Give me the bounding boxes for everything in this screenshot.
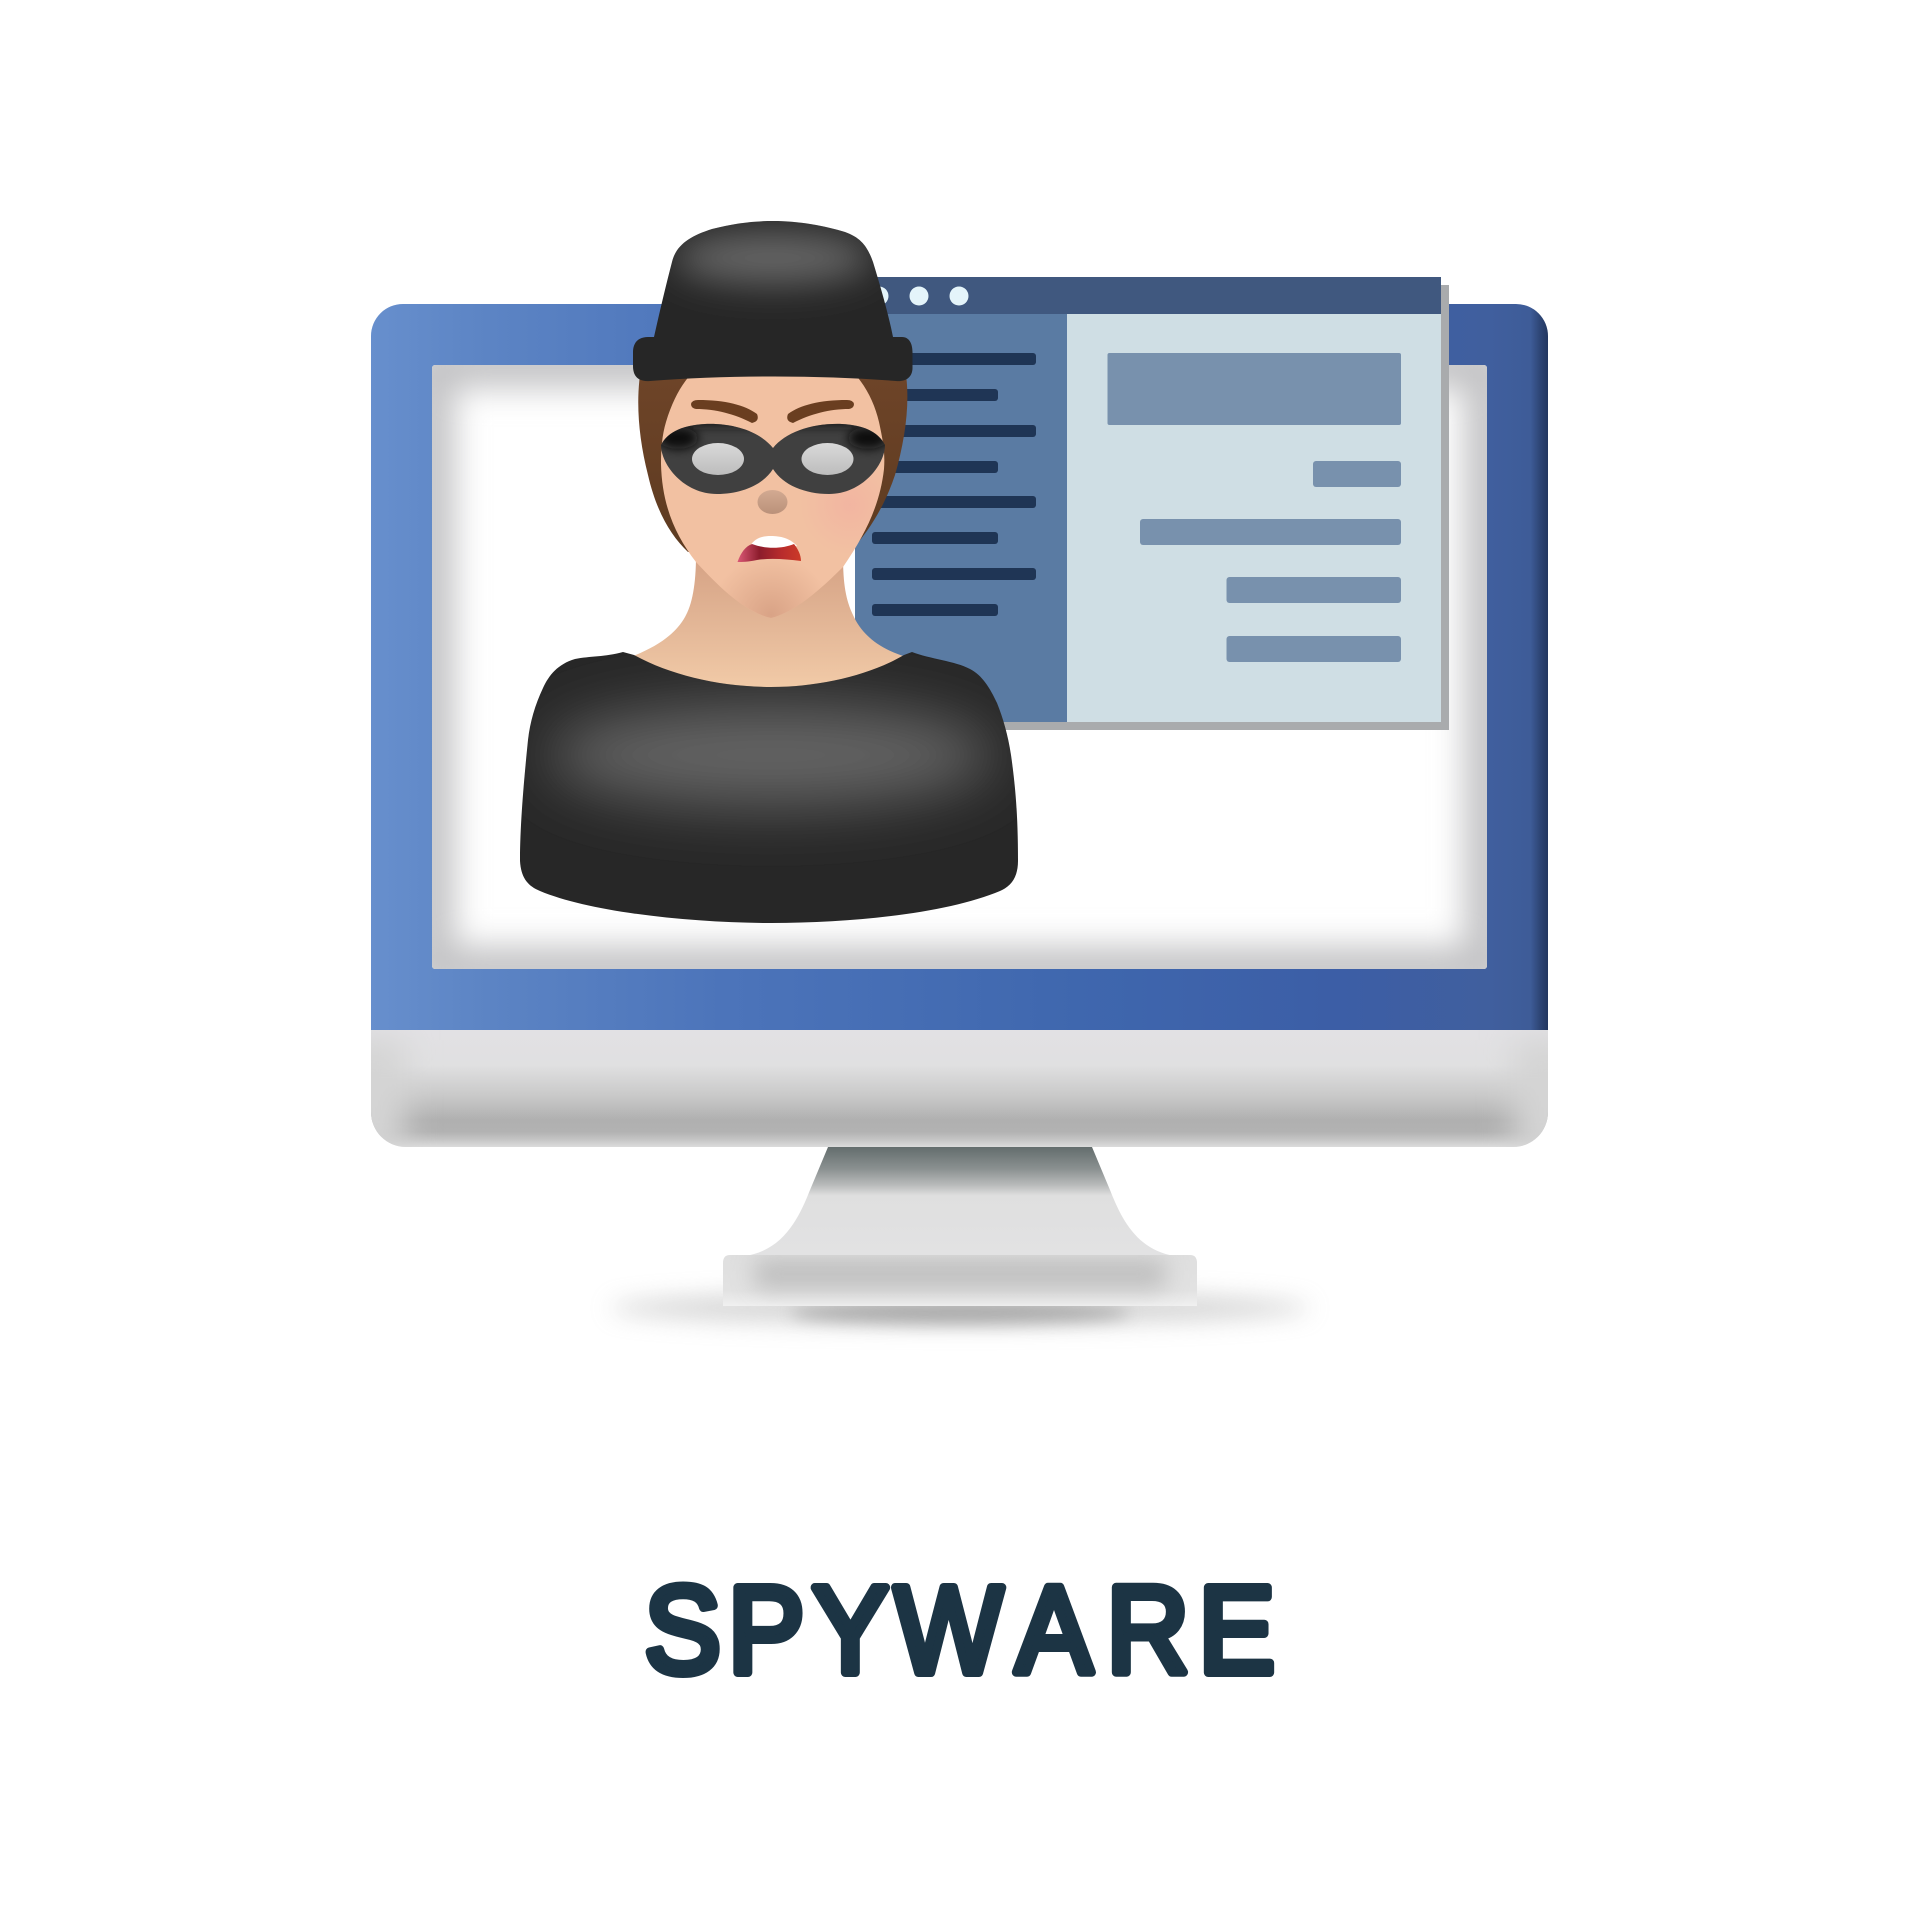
screen xyxy=(432,365,1487,969)
stand base xyxy=(723,1255,1197,1306)
face xyxy=(661,374,884,618)
sidebar lines xyxy=(872,353,1036,616)
bezel xyxy=(371,304,1548,1030)
window dots xyxy=(870,286,968,306)
sidebar xyxy=(855,314,1067,722)
hat xyxy=(630,218,915,388)
torso xyxy=(510,645,1030,930)
left lens xyxy=(692,443,744,475)
spy figure xyxy=(510,218,1030,930)
stand neck xyxy=(745,1147,1175,1256)
content blocks xyxy=(1108,353,1401,662)
right lens xyxy=(802,443,854,475)
eyebrow right xyxy=(787,400,854,423)
nose xyxy=(758,490,788,514)
window shadow xyxy=(860,285,1449,730)
eyebrow left xyxy=(691,400,758,423)
ground shadow xyxy=(610,1292,1310,1324)
mouth xyxy=(738,536,801,562)
hair xyxy=(638,375,907,552)
title: SPYWARE xyxy=(644,1562,1275,1699)
browser window xyxy=(855,277,1449,730)
title bar xyxy=(855,277,1441,315)
neck xyxy=(628,555,910,702)
eye mask xyxy=(661,424,885,494)
monitor xyxy=(340,304,1579,1306)
content pane xyxy=(1067,314,1441,722)
infographic canvas xyxy=(371,221,1548,1678)
chin xyxy=(371,1030,1548,1147)
